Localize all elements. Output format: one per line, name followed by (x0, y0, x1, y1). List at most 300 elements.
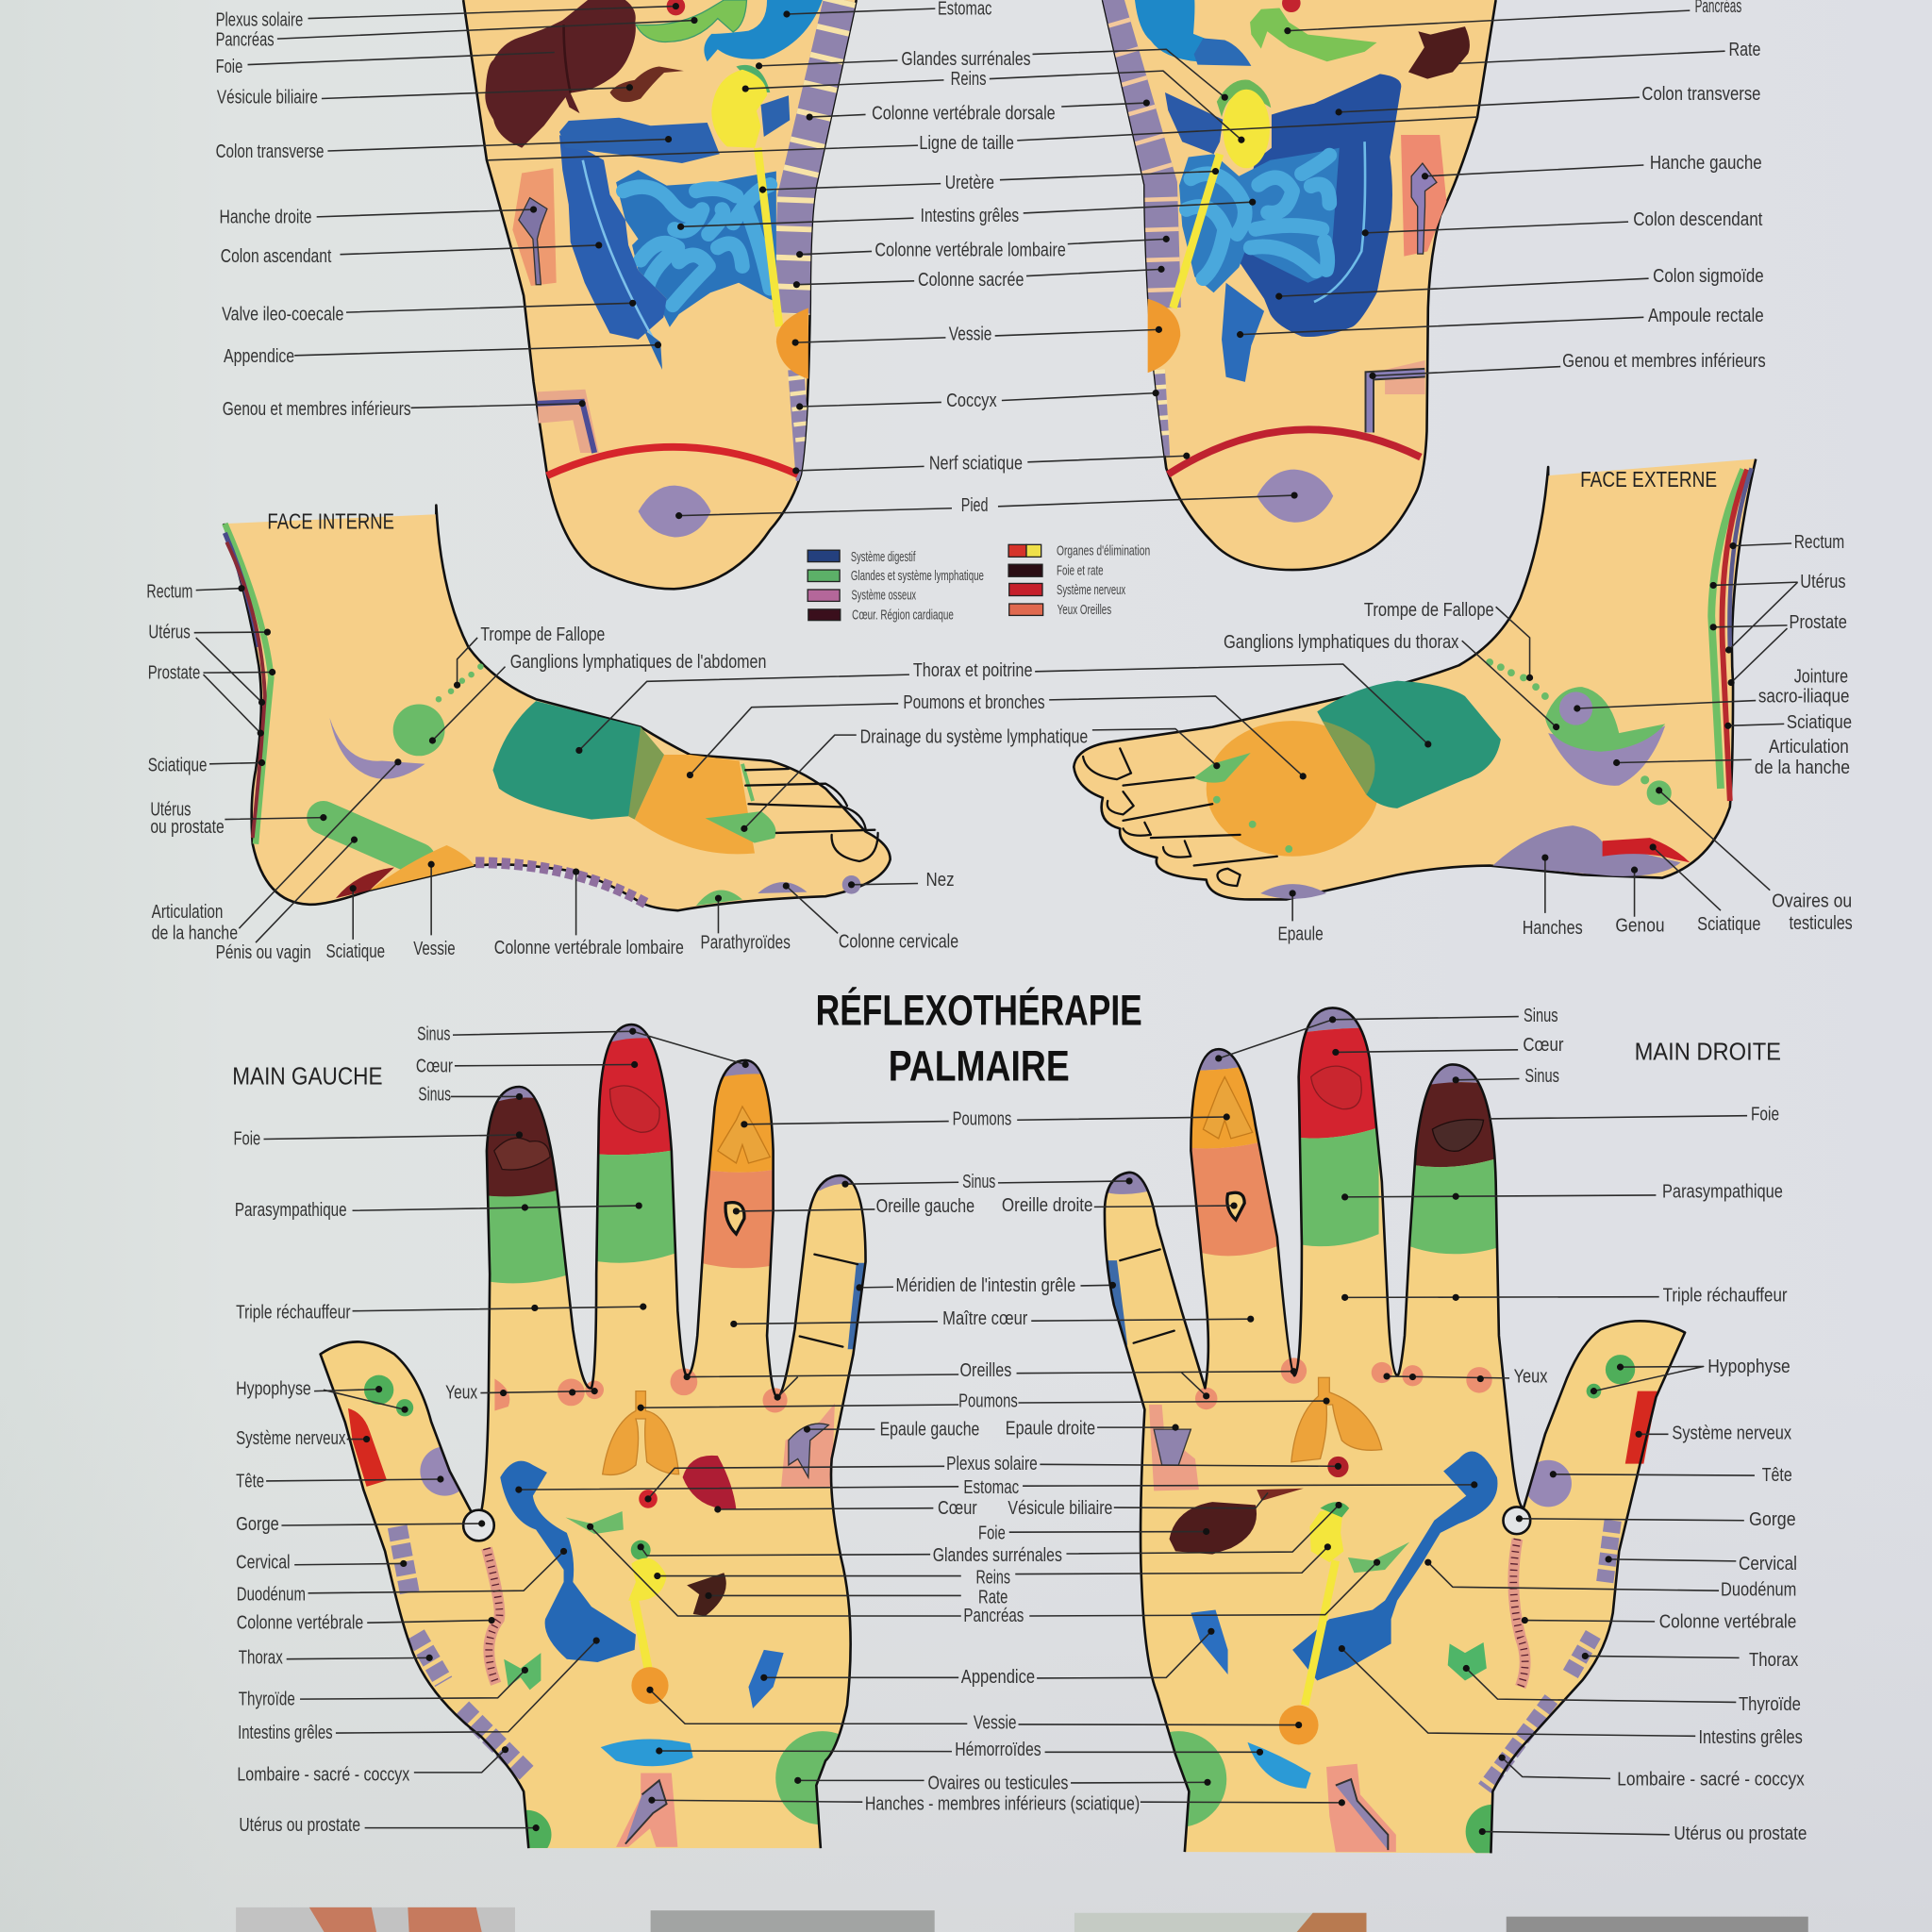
labels: right hand: Cervical (1739, 1554, 1797, 1574)
icon: lymph comma (1545, 687, 1665, 752)
icon: gallbladder (1257, 1489, 1304, 1501)
anchor dots (1217, 546, 1733, 893)
labels: top-left sole and inner foot: Parathyroïdes (701, 933, 791, 954)
icon: transverse colon (559, 118, 720, 163)
icon: lungs on finger (718, 1107, 770, 1163)
labels: top-left sole and inner foot: Pénis ou vagin (216, 942, 311, 963)
labels: top-right sole and outer foot: Ganglions lymphatiques du thorax (1224, 632, 1458, 653)
labels: top-left sole and inner foot: Sciatique (148, 756, 207, 776)
labels: top-left sole and inner foot: Hanche droite (219, 207, 311, 227)
labels: left hand: Thorax (239, 1647, 283, 1668)
labels: right hand: Sinus (1524, 1066, 1559, 1087)
labels: centre column hands: Reins (975, 1567, 1010, 1588)
labels: left hand: Cervical (236, 1553, 291, 1574)
icon: spine ticks (487, 1548, 500, 1684)
labels: centre column hands: Estomac (963, 1477, 1019, 1498)
labels: centre column hands: Maître cœur (942, 1308, 1028, 1329)
icon: nose point (842, 875, 860, 894)
labels: right hand: Hypophyse (1707, 1357, 1790, 1377)
labels: top-left sole and inner foot: de la hanche (152, 923, 238, 943)
labels: top-left sole and inner foot: Sciatique (325, 941, 385, 962)
labels: left hand: Système nerveux (236, 1428, 345, 1449)
icon: bladder (1148, 299, 1180, 373)
labels: top-right sole and outer foot: Trompe de Fallope (1364, 600, 1494, 621)
labels: left hand: Sinus (418, 1084, 451, 1105)
foot outline (1103, 0, 1496, 570)
icon: solar plexus (1327, 1457, 1349, 1477)
icon: solar plexus (667, 0, 685, 15)
labels: centre column hands (865, 1108, 1140, 1815)
icon: ovaries testes (775, 1731, 838, 1824)
icon: spine (793, 0, 844, 480)
icon: left shoulder (781, 1404, 835, 1487)
icon: sciatic zone (336, 868, 394, 898)
labels: top-right sole and outer foot: Hanche gauche (1650, 153, 1762, 174)
labels: left hand: Parasympathique (235, 1200, 347, 1221)
icon: pancreas (636, 0, 747, 42)
labels: top-left sole and inner foot: Colon transverse (216, 142, 325, 162)
labels: top-left sole and inner foot: Utérus (150, 800, 191, 821)
anchor dots (1112, 1020, 1639, 1832)
labels: centre column hands: Appendice (961, 1667, 1035, 1688)
labels: centre column hands: Poumons (958, 1391, 1018, 1412)
icon: spine ticks (1513, 1539, 1525, 1687)
labels: top-left sole and inner foot: Articulation (152, 902, 223, 923)
icon: pituitary (1587, 1355, 1635, 1398)
labels: top-left sole and inner foot: Pancréas (216, 29, 275, 50)
labels: centre column feet: Coccyx (946, 391, 997, 411)
labels: left hand: Tête (236, 1471, 264, 1491)
icon: knee and legs (1370, 360, 1425, 432)
icon: overlap zone (628, 727, 664, 820)
icon: colon (1165, 74, 1401, 337)
icon: stomach duodenum intestine (1292, 1451, 1497, 1681)
labels: left hand: Intestins grêles (238, 1723, 333, 1743)
icon: ovaries testes (1641, 775, 1672, 806)
labels: right hand: Système nerveux (1672, 1424, 1791, 1444)
labels: top-left sole and inner foot: Nez (926, 870, 955, 891)
labels: top-left sole and inner foot: Vessie (413, 939, 456, 959)
icon: bladder (1279, 1706, 1319, 1744)
labels: top-left sole and inner foot: Rectum (146, 581, 192, 602)
icon: thorax stripes (1569, 1635, 1593, 1677)
labels: right hand: Triple réchauffeur (1663, 1285, 1788, 1306)
icon: adrenal gland (631, 1541, 651, 1560)
labels: top-left sole and inner foot: Plexus solaire (216, 9, 303, 30)
icon: lymph nodes abdomen (393, 704, 445, 756)
icon: haemorrhoids (601, 1739, 693, 1766)
labels: centre column hands: Méridien de l'intestin grêle (896, 1275, 1075, 1296)
icon: heart on finger (1311, 1066, 1361, 1109)
icon: hip crescent (329, 718, 425, 779)
icon: spleen (687, 1573, 726, 1616)
legend labels: Foie et rate (1057, 563, 1104, 578)
labels: centre column feet: Glandes surrénales (901, 49, 1031, 70)
foot outline (463, 0, 857, 589)
icon: thorax stripes (416, 1635, 443, 1682)
icon: bladder (776, 308, 808, 379)
icon: thyroid (504, 1653, 541, 1690)
icon: bladder (631, 1667, 669, 1704)
labels: right hand (1514, 1006, 1807, 1844)
labels: centre column feet: Pied (961, 495, 989, 516)
icon: spleen (1408, 26, 1470, 79)
labels: top-left sole and inner foot: Colonne vertébrale lombaire (494, 938, 684, 958)
photo: hand 1 (236, 1907, 515, 1932)
icon: eye and ear points (1195, 1357, 1492, 1409)
icon: head (1524, 1460, 1572, 1507)
icon: ear (1227, 1192, 1244, 1220)
legend labels (851, 543, 1150, 623)
legend labels: Système digestif (851, 550, 916, 565)
icon: pancreas (566, 1511, 624, 1534)
icon: bladder zone (370, 845, 475, 891)
labels: top-right sole and outer foot: Articulation (1769, 737, 1849, 758)
labels: left hand: Utérus ou prostate (239, 1815, 360, 1836)
legend labels: Organes d'élimination (1057, 543, 1150, 558)
icon: overlap zone (1322, 721, 1375, 794)
icon: ascending colon (559, 135, 667, 340)
icon: lymph drainage (1194, 753, 1251, 783)
anchor dots (534, 7, 809, 516)
icon: right hip (512, 168, 557, 286)
labels: centre column hands: Glandes surrénales (933, 1545, 1062, 1566)
photo: hand 4 (1507, 1917, 1808, 1932)
labels: top-left sole and inner foot: Trompe de Fallope (480, 625, 605, 645)
labels: top-right sole and outer foot: Utérus (1800, 572, 1846, 592)
labels: centre column feet: Ligne de taille (919, 133, 1014, 154)
panel: right hand (998, 1003, 1808, 1932)
labels: top-right sole and outer foot: Ovaires ou (1772, 891, 1852, 911)
labels: centre column hands: Rate (978, 1587, 1008, 1607)
labels: right hand: Yeux (1514, 1366, 1547, 1387)
labels: top-right sole and outer foot: Hanches (1523, 918, 1583, 939)
labels: centre column feet (860, 0, 1088, 748)
icon: heart on finger (610, 1086, 659, 1132)
icon: lungs orange zone (635, 755, 755, 854)
icon: foot zone oval (639, 486, 711, 537)
icon: cervical spine zone (758, 882, 808, 893)
icon: thorax teal zone (492, 701, 662, 820)
labels: centre column feet: Uretère (945, 173, 994, 193)
icon: stomach (1135, 0, 1251, 66)
icon: eye and ear points (494, 1368, 788, 1412)
labels: centre column hands: Vessie (974, 1712, 1017, 1733)
labels: top-right sole and outer foot: Jointure (1794, 667, 1848, 688)
icon: small intestine (616, 170, 776, 327)
icon: lymph dots (1217, 662, 1545, 849)
heading: face interne: FACE INTERNE (267, 508, 394, 533)
labels: centre column hands: Ovaires ou testicules (928, 1773, 1068, 1793)
anchor dots (1146, 31, 1425, 495)
labels: left hand: Gorge (236, 1514, 279, 1535)
labels: centre column hands: Poumons (953, 1108, 1011, 1129)
labels: centre column hands: Cœur (938, 1498, 977, 1519)
labels: top-left sole and inner foot: Foie (216, 57, 242, 77)
icon: throat ring (463, 1510, 494, 1541)
panel: left sole (248, 0, 952, 589)
labels: left hand: Foie (234, 1128, 260, 1149)
icon: right shoulder (1149, 1405, 1199, 1491)
icon: ampulla (1222, 283, 1264, 382)
title: RÉFLEXOTHÉRAPIE (816, 987, 1142, 1035)
icon: kidney (628, 1558, 667, 1601)
labels: top-left sole and inner foot: Colon ascendant (221, 246, 332, 267)
icon: hip (1326, 1764, 1396, 1852)
panel: outer foot (face externe) (1035, 459, 1798, 921)
labels: centre column feet: Vessie (949, 324, 991, 344)
icon: spine (1103, 0, 1162, 456)
foot outline (1074, 459, 1756, 899)
labels: right hand: Foie (1751, 1104, 1779, 1124)
labels: centre column hands: Pancréas (963, 1606, 1024, 1626)
icon: kidney (1309, 1508, 1343, 1562)
icon: uterus prostate (1466, 1804, 1491, 1853)
icon: small colon piece (761, 95, 790, 137)
icon: spine (487, 1548, 500, 1684)
labels: centre column feet: Colonne vertébrale lombaire (874, 241, 1066, 261)
labels: left hand: Colonne vertébrale (237, 1613, 363, 1634)
icon: knee and legs (537, 390, 599, 453)
labels: centre column feet: Nerf sciatique (929, 454, 1023, 475)
title (816, 987, 1142, 1090)
leader lines (248, 7, 952, 516)
icon: cervical stripes (1605, 1521, 1613, 1582)
icon: foot zone oval (1257, 470, 1333, 523)
labels: left hand: Triple réchauffeur (236, 1303, 351, 1324)
labels: centre column hands: Epaule gauche (880, 1420, 979, 1441)
labels: top-left sole and inner foot: Prostate (148, 663, 200, 684)
leader lines (1035, 543, 1798, 921)
icon: adrenal gland (1321, 1502, 1349, 1517)
labels: centre column feet: Reins (951, 69, 987, 90)
labels: right hand: Thorax (1749, 1650, 1798, 1671)
anchor dots (242, 589, 852, 898)
labels: right hand: Lombaire - sacré - coccyx (1617, 1770, 1805, 1790)
legend labels: Yeux Oreilles (1058, 603, 1111, 618)
labels: top-left sole and inner foot (146, 9, 958, 963)
icon: lumbar spine (475, 862, 648, 905)
labels: centre column hands: Foie (978, 1523, 1006, 1543)
icon: kidney (711, 70, 767, 148)
labels: left hand: Duodénum (237, 1585, 306, 1606)
labels: top-right sole and outer foot: Genou et membres inférieurs (1562, 351, 1766, 372)
icon: toes (1083, 748, 1277, 886)
labels: right hand: Tête (1762, 1465, 1792, 1486)
labels: left hand: Hypophyse (236, 1379, 311, 1400)
icon: left hip (1401, 135, 1446, 257)
legend (808, 543, 1150, 623)
leader lines (990, 10, 1725, 507)
labels: centre column feet: Thorax et poitrine (913, 660, 1033, 681)
icon: fallopian tube dots (439, 667, 480, 699)
labels: top-right sole and outer foot: Sciatique (1787, 712, 1852, 733)
icon: parathyroid zone (696, 890, 742, 906)
icon: hip crescent (1548, 725, 1665, 786)
icon: stomach (704, 0, 823, 61)
icon: shoulder zone (1260, 884, 1326, 899)
labels: centre column feet: Poumons et bronches (903, 692, 1045, 713)
icon: edge strips rectum uterus (225, 524, 271, 844)
labels: centre column hands: Plexus solaire (946, 1454, 1038, 1474)
labels: right hand: Thyroïde (1739, 1694, 1801, 1715)
labels: top-right sole and outer foot: testicules (1789, 913, 1853, 934)
labels: right hand: Duodénum (1721, 1579, 1796, 1600)
hand fill (321, 1024, 866, 1848)
labels: right hand: Intestins grêles (1698, 1727, 1803, 1748)
photo: hand 3 (1074, 1913, 1366, 1932)
labels: top-right sole and outer foot: Prostate (1789, 612, 1847, 633)
icon: pituitary (364, 1375, 413, 1416)
labels: centre column feet: Drainage du système lymphatique (860, 727, 1088, 748)
icon: lungs (603, 1391, 679, 1474)
icon: ureter (758, 148, 779, 326)
labels: top-right sole and outer foot: Ampoule rectale (1648, 306, 1764, 326)
icon: appendix (643, 329, 662, 370)
labels: right hand: Sinus (1524, 1006, 1558, 1026)
icon: nervous system (348, 1408, 387, 1487)
legend labels: Système nerveux (1057, 583, 1126, 598)
icon: pancreas (1250, 8, 1377, 61)
icon: solar plexus (1282, 0, 1301, 12)
icon: teal thorax zone (1317, 681, 1501, 808)
icon: adrenal gland (736, 65, 770, 92)
legend labels: Cœur. Région cardiaque (852, 608, 954, 623)
labels: left hand: Thyroïde (239, 1690, 295, 1710)
labels: top-right sole and outer foot: Genou (1615, 915, 1665, 936)
labels: top-right sole and outer foot: Colon transverse (1641, 84, 1760, 105)
labels: top-right sole and outer foot: Sciatique (1697, 914, 1760, 935)
legend swatches (808, 544, 1043, 621)
icon: spine (1513, 1539, 1525, 1687)
labels: centre column hands: Sinus (962, 1172, 995, 1192)
hand fill (1105, 1008, 1685, 1853)
labels: top-left sole and inner foot: Appendice (224, 346, 294, 367)
icon: cervical stripes (397, 1526, 409, 1593)
title: PALMAIRE (889, 1041, 1070, 1090)
finger colour bands (420, 1015, 869, 1859)
labels: top-left sole and inner foot: Vésicule biliaire (217, 88, 318, 108)
photo: hand 2 (651, 1910, 935, 1932)
finger colour bands (1105, 1003, 1572, 1858)
panel: right sole (990, 0, 1725, 570)
labels: top-left sole and inner foot: Ganglions lymphatiques de l'abdomen (510, 652, 766, 673)
icon: uterus prostate (526, 1809, 551, 1849)
icon: lumbar stripes (462, 1708, 526, 1774)
icon: sciatic nerve (1168, 429, 1421, 475)
heading: face externe: FACE EXTERNE (1580, 467, 1717, 491)
icon: orange lung zone (1207, 721, 1379, 857)
icon: lymph drainage (711, 764, 774, 841)
icon: solar plexus (639, 1490, 658, 1508)
icon: nervous system (1625, 1391, 1657, 1464)
icon: throat ring (1503, 1507, 1530, 1534)
panel: left hand (232, 1015, 967, 1932)
labels: top-right sole and outer foot (1224, 0, 1853, 945)
leader lines (194, 589, 918, 942)
icon: ureter (635, 1601, 648, 1668)
icon: kidney (1223, 90, 1270, 168)
labels: top-left sole and inner foot: Utérus (148, 623, 191, 643)
labels: left hand: Cœur (416, 1056, 453, 1076)
heading: main gauche: MAIN GAUCHE (232, 1061, 383, 1090)
labels: right hand: Colonne vertébrale (1659, 1611, 1796, 1632)
hand outline (321, 1024, 866, 1848)
labels: centre column hands: Oreille droite (1002, 1195, 1093, 1216)
labels: top-right sole and outer foot: Colon sigmoïde (1653, 266, 1764, 287)
icon: heart (683, 1456, 736, 1509)
labels: right hand: Cœur (1523, 1035, 1564, 1056)
labels: top-right sole and outer foot: Colon descendant (1633, 209, 1763, 230)
icon: sacroiliac joint (1559, 691, 1592, 725)
icon: hips zone (1492, 825, 1681, 876)
legend labels: Système osseux (852, 588, 917, 603)
icon: ureter (1305, 1560, 1336, 1706)
icon: liver (485, 0, 636, 148)
labels: right hand: Utérus ou prostate (1674, 1824, 1807, 1844)
icon: hip (616, 1774, 677, 1847)
labels: centre column feet: Colonne sacrée (918, 270, 1024, 291)
icon: ovaries testes (1170, 1731, 1226, 1826)
leader lines (264, 1031, 967, 1828)
icon: lungs on finger (1203, 1077, 1253, 1139)
labels: right hand: Parasympathique (1662, 1182, 1783, 1203)
labels: left hand: Sinus (417, 1024, 450, 1044)
labels: left hand: Lombaire - sacré - coccyx (237, 1764, 409, 1785)
labels: top-left sole and inner foot: Genou et membres inférieurs (223, 399, 411, 420)
icon: stomach duodenum intestine (500, 1461, 636, 1662)
labels: centre column hands: Hanches - membres inférieurs (sciatique) (865, 1794, 1140, 1815)
thumb crease lines (800, 1255, 858, 1347)
icon: edge strips (1711, 468, 1752, 801)
icon: head (420, 1447, 458, 1496)
labels: centre column hands: Vésicule biliaire (1008, 1498, 1112, 1519)
labels: top-left sole and inner foot: Colonne cervicale (839, 931, 958, 952)
icon: lungs (1291, 1377, 1382, 1462)
icon: liver on finger (1432, 1120, 1484, 1151)
labels: centre column feet: Intestins grêles (921, 206, 1019, 226)
icon: haemorrhoids (1247, 1742, 1311, 1789)
icon: uterus prostate (324, 818, 419, 859)
icon: thyroid (1448, 1642, 1487, 1681)
panel: inner foot (face interne) (194, 506, 918, 942)
foot outline (224, 506, 891, 910)
icon: ear (725, 1203, 744, 1234)
labels: centre column hands: Oreille gauche (876, 1196, 974, 1217)
legend labels: Glandes et système lymphatique (851, 569, 984, 584)
icon: appendix (1191, 1609, 1228, 1674)
icon: toes (745, 769, 878, 861)
icon: sciatic nerve (547, 447, 798, 475)
labels: right hand: Gorge (1749, 1509, 1796, 1530)
icon: adrenal gland (1217, 80, 1271, 117)
labels: left hand (234, 1024, 477, 1836)
hand outline (1105, 1008, 1685, 1853)
anchor dots (367, 1031, 859, 1828)
leader lines (998, 1017, 1755, 1835)
labels: top-right sole and outer foot: sacro-iliaque (1758, 686, 1849, 707)
labels: top-right sole and outer foot: Rectum (1794, 532, 1844, 553)
labels: top-left sole and inner foot: Valve ileo-coecale (222, 305, 343, 325)
labels: centre column hands: Epaule droite (1006, 1418, 1095, 1439)
icon: small intestine (1179, 148, 1340, 292)
icon: sciatic nerve (1603, 838, 1690, 862)
icon: lumbar stripes (1485, 1699, 1551, 1789)
heading: main droite: MAIN DROITE (1635, 1037, 1781, 1065)
pinkie crease lines (1120, 1249, 1174, 1343)
labels: top-right sole and outer foot: de la hanche (1755, 758, 1850, 778)
labels: centre column hands: Oreilles (959, 1360, 1011, 1381)
